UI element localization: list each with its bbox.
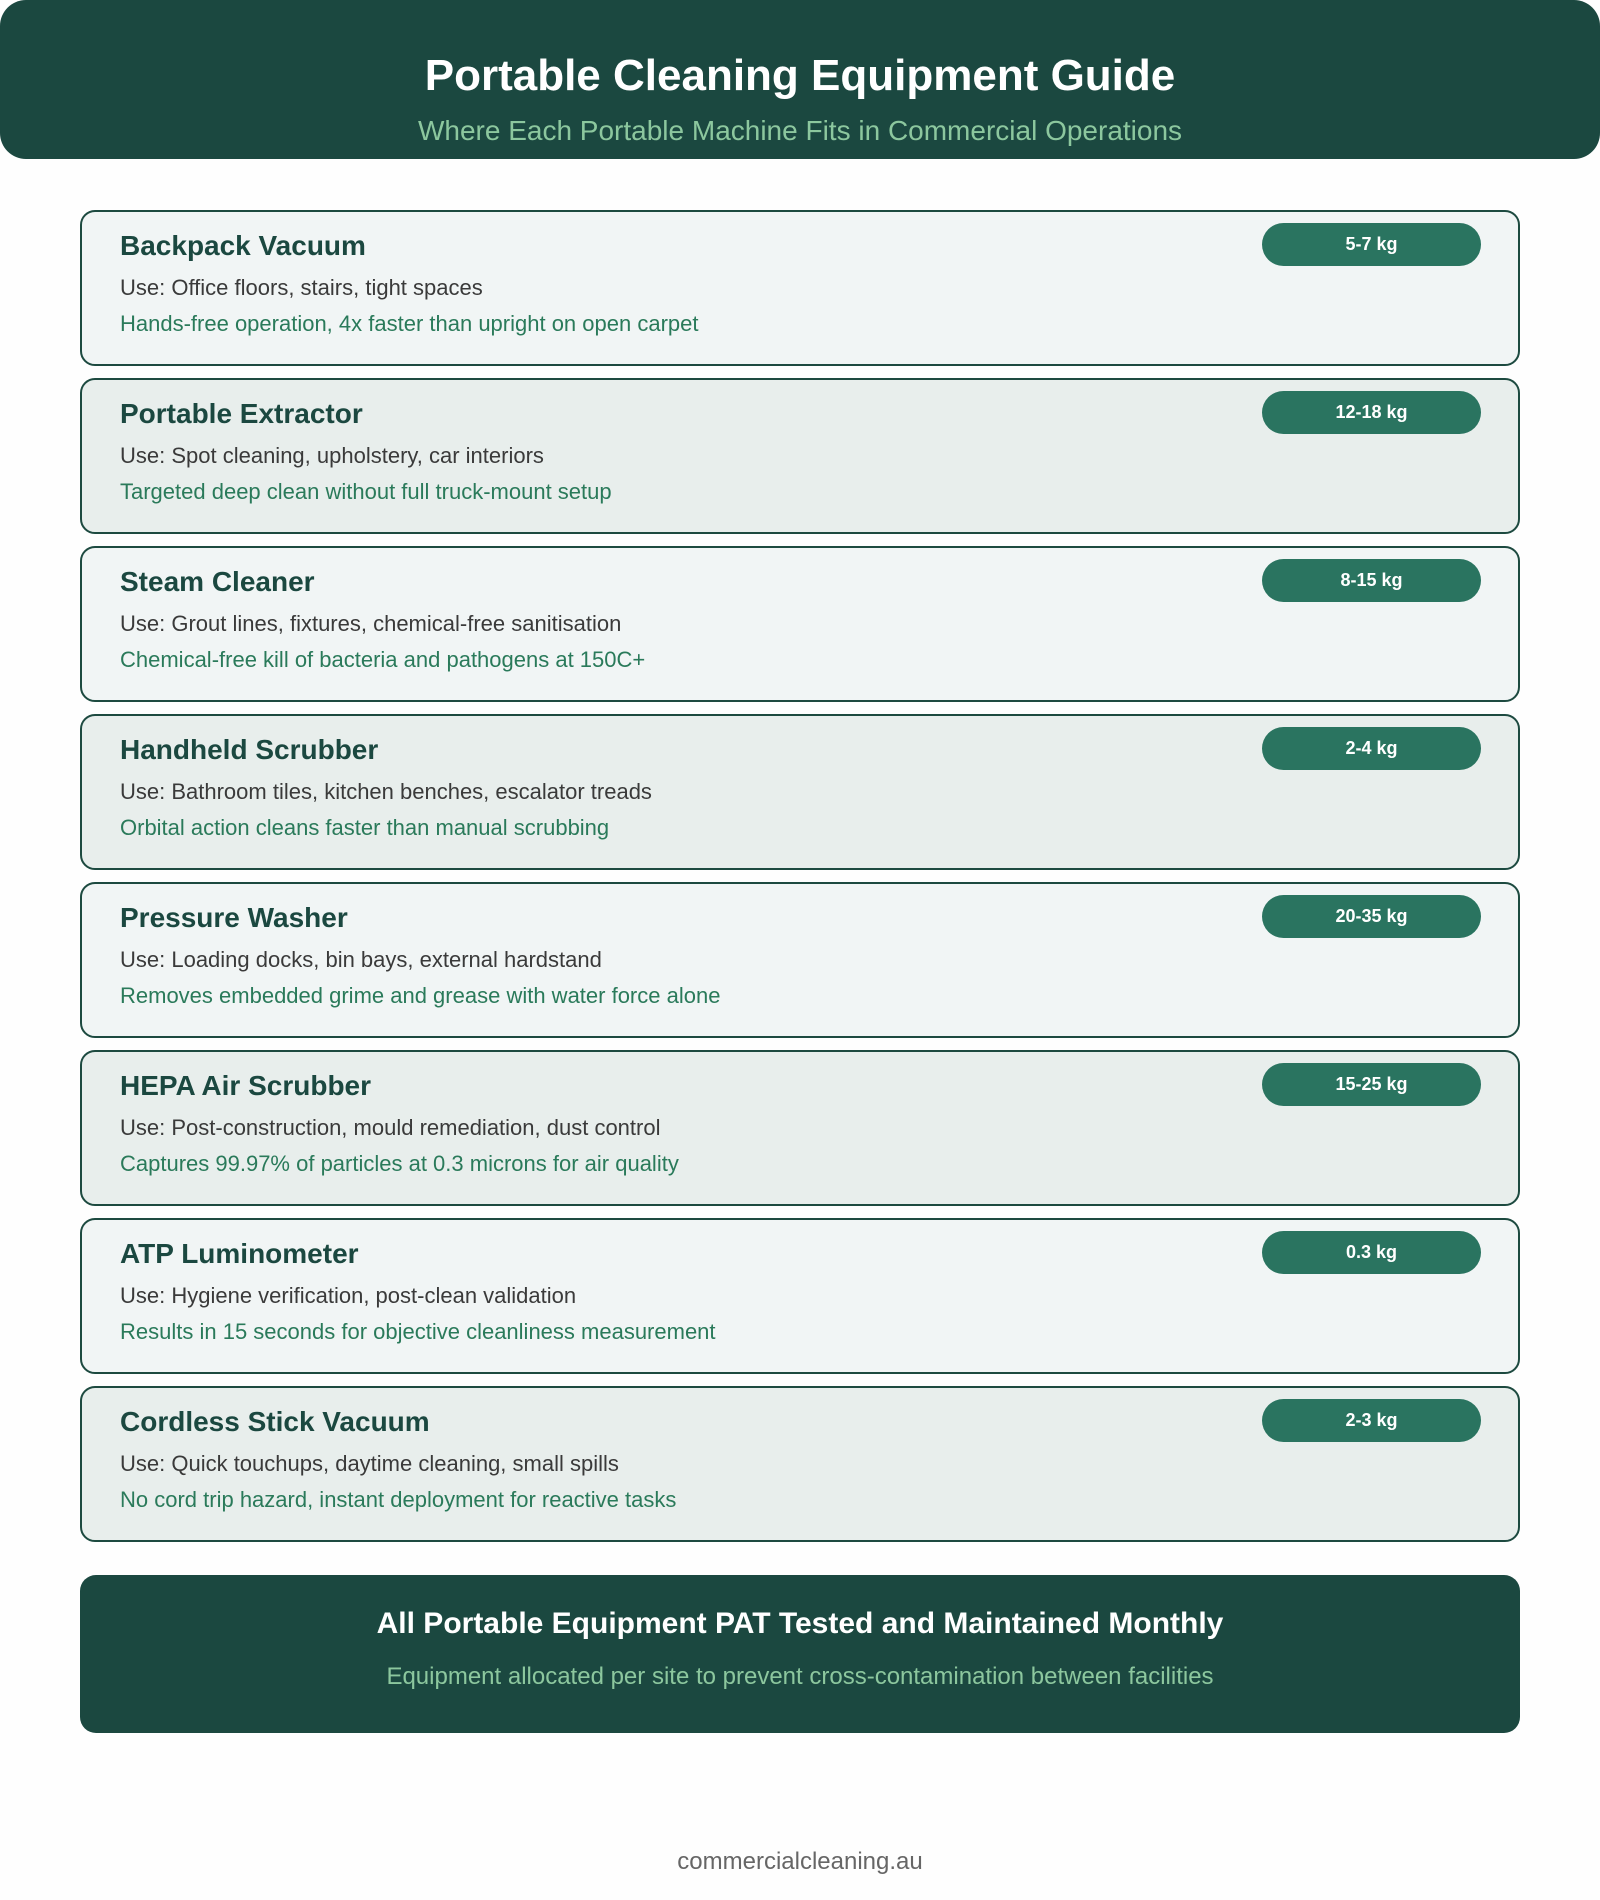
card: backpack vacuum: Use: Office floors, stairs, tight spaces [120, 275, 483, 300]
card: backpack vacuum: Hands-free operation, 4x faster than upright on open carpet [120, 311, 698, 336]
card: cordless stick vacuum [80, 1386, 1520, 1542]
header [0, 0, 1600, 159]
card: ATP luminometer: ATP Luminometer [120, 1238, 359, 1269]
card: cordless stick vacuum: 2-3 kg [1345, 1410, 1398, 1430]
card: portable extractor: 12-18 kg [1335, 402, 1408, 422]
card: handheld scrubber [80, 714, 1520, 870]
card: cordless stick vacuum: Use: Quick touchups, daytime cleaning, small spills [120, 1451, 619, 1476]
footer banner [80, 1575, 1520, 1733]
card: pressure washer: Removes embedded grime and grease with water force alone [120, 983, 720, 1008]
card: portable extractor: Portable Extractor [120, 398, 363, 429]
card: HEPA air scrubber [80, 1050, 1520, 1206]
card: portable extractor [80, 378, 1520, 534]
card: cordless stick vacuum: No cord trip hazard, instant deployment for reactive tasks [120, 1487, 676, 1512]
card: handheld scrubber: Handheld Scrubber [120, 734, 378, 765]
footer subtitle: Equipment allocated per site to prevent cross-contamination between facilities [386, 1663, 1214, 1690]
card: backpack vacuum: 5-7 kg [1345, 234, 1398, 254]
card: handheld scrubber: 2-4 kg [1345, 738, 1398, 758]
card: steam cleaner: Steam Cleaner [120, 566, 315, 597]
title: Portable Cleaning Equipment Guide [425, 51, 1175, 100]
card: portable extractor: Targeted deep clean without full truck-mount setup [120, 479, 612, 504]
card: steam cleaner [80, 546, 1520, 702]
website: commercialcleaning.au [677, 1848, 923, 1875]
card: HEPA air scrubber: Captures 99.97% of particles at 0.3 microns for air quality [120, 1151, 679, 1176]
card: pressure washer: 20-35 kg [1335, 906, 1408, 926]
card: steam cleaner: Use: Grout lines, fixtures, chemical-free sanitisation [120, 611, 621, 636]
card: handheld scrubber: Use: Bathroom tiles, kitchen benches, escalator treads [120, 779, 652, 804]
card: steam cleaner: 8-15 kg [1340, 570, 1403, 590]
card: backpack vacuum [80, 210, 1520, 366]
card: HEPA air scrubber: 15-25 kg [1335, 1074, 1408, 1094]
card: ATP luminometer: Results in 15 seconds for objective cleanliness measurement [120, 1319, 716, 1344]
card: handheld scrubber: Orbital action cleans faster than manual scrubbing [120, 815, 609, 840]
card: backpack vacuum: Backpack Vacuum [120, 230, 366, 261]
card: cordless stick vacuum: Cordless Stick Vacuum [120, 1406, 430, 1437]
card: steam cleaner: Chemical-free kill of bacteria and pathogens at 150C+ [120, 647, 645, 672]
card: pressure washer: Use: Loading docks, bin bays, external hardstand [120, 947, 602, 972]
card: portable extractor: Use: Spot cleaning, upholstery, car interiors [120, 443, 544, 468]
card: ATP luminometer: 0.3 kg [1346, 1242, 1397, 1262]
footer title: All Portable Equipment PAT Tested and Maintained Monthly [377, 1607, 1223, 1640]
card: pressure washer: Pressure Washer [120, 902, 348, 933]
subtitle: Where Each Portable Machine Fits in Commercial Operations [418, 115, 1182, 146]
card: ATP luminometer: Use: Hygiene verification, post-clean validation [120, 1283, 576, 1308]
card: pressure washer [80, 882, 1520, 1038]
card: ATP luminometer [80, 1218, 1520, 1374]
card: HEPA air scrubber: HEPA Air Scrubber [120, 1070, 371, 1101]
card: HEPA air scrubber: Use: Post-construction, mould remediation, dust control [120, 1115, 660, 1140]
